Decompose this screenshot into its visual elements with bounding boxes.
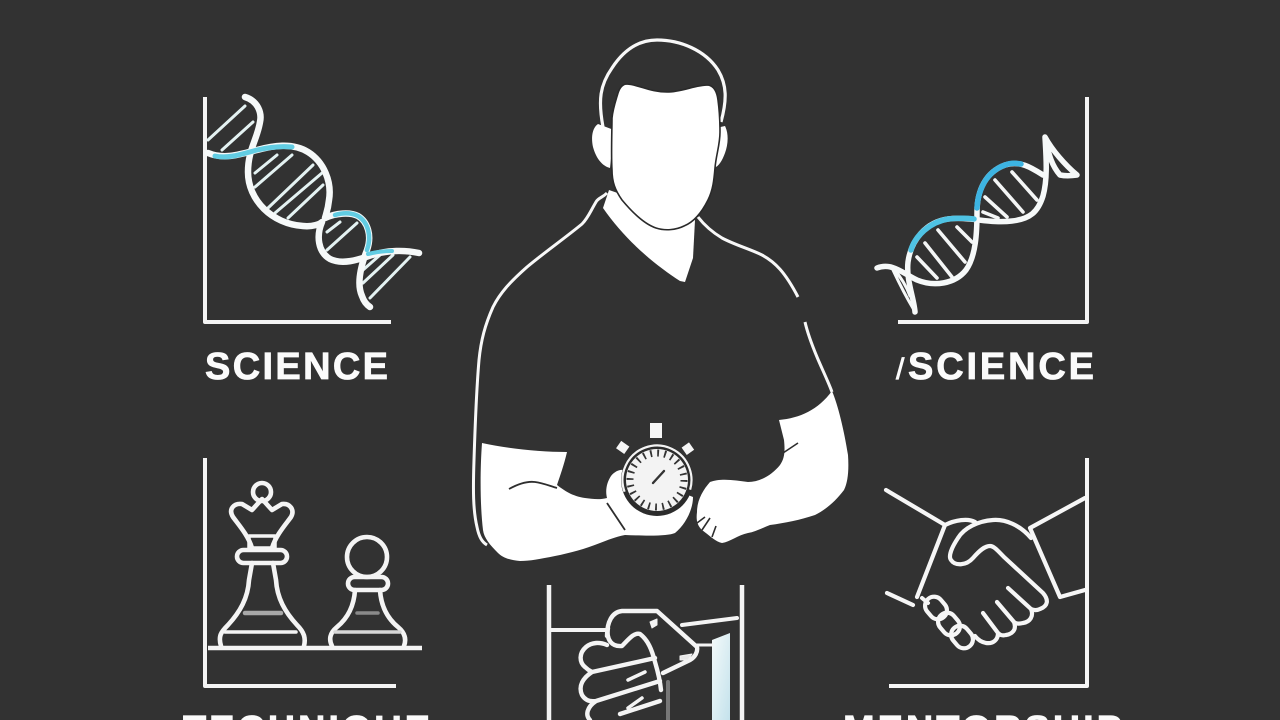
face — [612, 84, 720, 230]
left arm and hand — [481, 443, 693, 561]
panel: science left — [205, 97, 419, 322]
heading: science left: SCIENCE — [205, 346, 388, 388]
light bar — [712, 633, 730, 720]
shoulder outline left — [473, 193, 607, 545]
panel: science right — [877, 97, 1087, 322]
icon: stopwatch — [613, 423, 701, 524]
right arm — [697, 391, 848, 543]
sleeve edge right — [805, 322, 832, 392]
right arm creases — [697, 443, 798, 537]
chart frame technique — [205, 458, 396, 686]
chart frame right — [898, 97, 1087, 322]
crossbar — [550, 618, 737, 630]
panel: grip strength — [549, 585, 742, 720]
chart frame mentorship — [889, 458, 1087, 686]
left arm creases — [509, 482, 625, 530]
icon: DNA helix left — [208, 97, 419, 307]
shoulder outline right — [698, 217, 798, 297]
shelf — [208, 646, 422, 650]
heading: science right: / — [896, 353, 905, 386]
icon: fist — [581, 611, 712, 720]
chart frame left — [205, 97, 391, 322]
ears — [592, 124, 728, 168]
icon: DNA helix right — [877, 137, 1077, 312]
panel: mentorship — [886, 458, 1087, 686]
icon: chess queen — [220, 483, 305, 646]
heading: science right: SCIENCE — [908, 346, 1094, 388]
hair outline — [600, 40, 725, 127]
panel: technique — [205, 458, 422, 686]
icon: handshake — [886, 490, 1085, 652]
frame posts — [549, 585, 742, 720]
central figure — [473, 40, 848, 561]
neck and collar — [603, 190, 695, 282]
icon: chess pawn — [330, 537, 405, 646]
